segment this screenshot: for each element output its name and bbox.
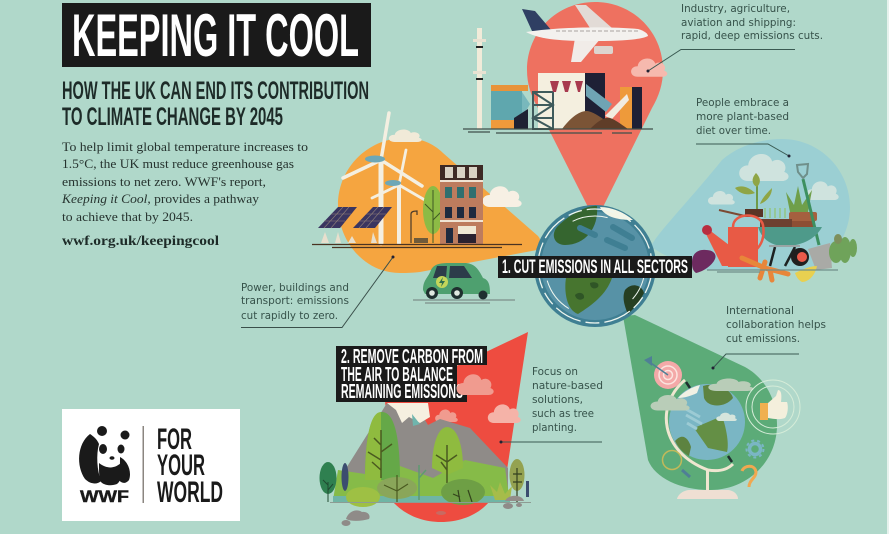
callout: power	[241, 256, 394, 328]
icon: townhouse	[440, 165, 483, 244]
icon: target	[644, 356, 682, 389]
icon: cloud orange top	[389, 130, 422, 142]
icon: plane	[522, 5, 648, 62]
icon: street tree and lamp	[411, 186, 443, 243]
callout: diet: more plant-based	[696, 111, 789, 123]
intro text: to achieve that by 2045.	[62, 209, 193, 224]
callout: diet: diet over time.	[696, 125, 771, 137]
logo: WWF	[62, 409, 240, 521]
subtitle	[62, 77, 369, 131]
icon: thumbs up	[746, 380, 800, 434]
intro text: Keeping it Cool, provides a pathway	[61, 191, 260, 206]
panel: orange pin	[338, 138, 541, 273]
wwf wordmark: WWF	[80, 488, 129, 506]
icon: garden plants	[719, 173, 817, 228]
icon: greens	[829, 234, 857, 263]
label: remove carbon: THE AIR TO BALANCE	[341, 364, 453, 386]
icon: carrots	[742, 258, 788, 280]
report link: wwf.org.uk/keepingcool	[62, 233, 219, 248]
intro text: emissions to net zero. WWF's report,	[62, 174, 266, 189]
intro text	[61, 139, 308, 224]
for your world: FOR	[157, 423, 192, 456]
panel: green pin	[623, 315, 777, 490]
label: remove carbon	[336, 346, 487, 403]
callout: international: collaboration helps	[726, 319, 826, 331]
icon: question mark	[742, 466, 756, 487]
callout: international: cut emissions.	[726, 333, 800, 345]
subtitle: HOW THE UK CAN END ITS CONTRIBUTION	[62, 77, 369, 105]
callout: industry	[646, 3, 823, 72]
for your world	[157, 423, 223, 509]
callout: nature: Focus on	[532, 366, 578, 378]
icon: cloud red pin	[631, 59, 667, 77]
callout: nature: planting.	[532, 422, 577, 434]
icon: wheelbarrow	[758, 227, 822, 266]
panel: carbon pin	[385, 332, 528, 522]
intro text: To help limit global temperature increases to	[62, 139, 308, 154]
icon: gear	[746, 440, 764, 458]
icon: carbon clouds	[435, 374, 521, 423]
icon: shovel	[797, 164, 819, 245]
title	[62, 2, 371, 69]
for your world: WORLD	[157, 476, 223, 509]
label: cut emissions	[498, 256, 692, 278]
callout: industry: rapid, deep emissions cuts.	[681, 30, 823, 42]
icon: bucket	[808, 243, 832, 270]
icon: cloud orange right	[483, 186, 522, 207]
callout: diet: People embrace a	[696, 97, 789, 109]
icon: magnifier	[662, 450, 690, 477]
callout: nature: solutions,	[532, 394, 583, 406]
icon: squash	[795, 266, 817, 282]
callout: nature: nature-based	[532, 380, 603, 392]
callout: power: transport: emissions	[241, 295, 349, 307]
icon: panda	[79, 426, 130, 485]
globe	[534, 205, 656, 327]
icon: electric car	[413, 263, 515, 303]
callout: industry: Industry, agriculture,	[681, 3, 790, 15]
callout: nature	[500, 366, 603, 444]
icon: beetroot	[692, 250, 716, 273]
icon: watering can	[702, 215, 764, 267]
icon: solar panels	[318, 207, 392, 243]
ground lines: power	[312, 244, 522, 248]
icon: garden clouds	[708, 154, 839, 204]
panel: red pin	[527, 2, 663, 207]
icon: small globe clouds	[651, 379, 754, 421]
icon: factory	[463, 28, 653, 133]
illustration: mountain forest	[320, 403, 531, 526]
callout: international: International	[726, 305, 794, 317]
title: KEEPING IT COOL	[72, 2, 359, 69]
callout: industry: aviation and shipping:	[681, 17, 796, 29]
label: remove carbon: REMAINING EMISSIONS	[341, 381, 463, 403]
intro text: 1.5°C, the UK must reduce greenhouse gas	[62, 156, 294, 171]
icon: small globe	[666, 380, 745, 499]
label: remove carbon: 2. REMOVE CARBON FROM	[341, 346, 483, 368]
subtitle: TO CLIMATE CHANGE BY 2045	[62, 103, 283, 131]
callout: diet	[696, 97, 790, 158]
for your world: YOUR	[157, 449, 205, 482]
callout: power: cut rapidly to zero.	[241, 310, 338, 322]
ground line: garden	[707, 270, 838, 272]
callout: nature: such as tree	[532, 408, 594, 420]
label: cut emissions: 1. CUT EMISSIONS IN ALL SECTORS	[502, 257, 688, 278]
panel: teal pin	[652, 139, 850, 270]
callout: power: Power, buildings and	[241, 282, 349, 294]
icon: wind turbines	[343, 113, 430, 243]
callout: international	[712, 305, 826, 370]
